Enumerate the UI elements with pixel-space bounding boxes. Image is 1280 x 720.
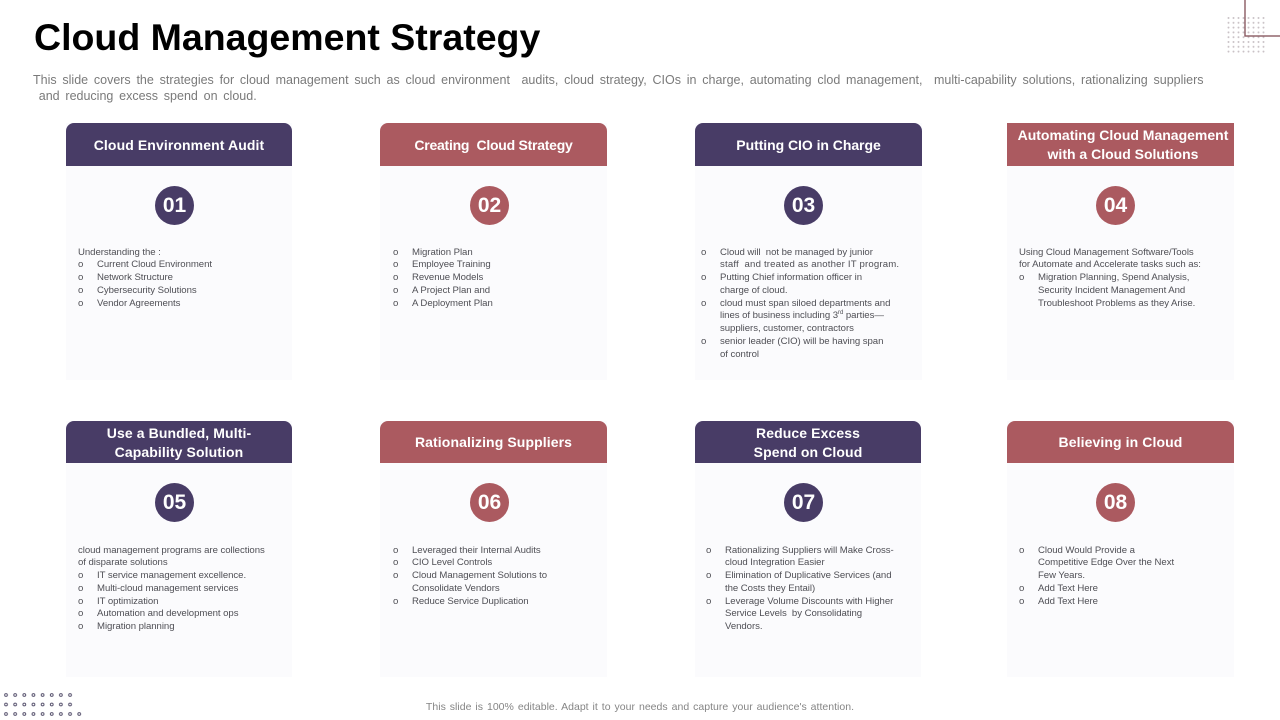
subtitle description: [33, 73, 1204, 102]
text block: card 03: of control: [720, 348, 759, 360]
text block: card 05: Migration planning: [97, 621, 174, 632]
text block: card 02: A Deployment Plan: [412, 298, 493, 308]
text block: card 07: Leverage Volume Discounts with Higher: [725, 596, 893, 606]
panel: card 03: [695, 123, 922, 380]
text block: card 07: Elimination of Duplicative Services (and: [725, 570, 892, 581]
number badge 07: [784, 483, 823, 522]
text block: card 03: senior leader (CIO) will be having span: [720, 336, 883, 347]
text block: card 03: charge of cloud.: [720, 285, 787, 296]
subtitle description: This slide covers the strategies for cloud management such as cloud environment audits, cloud strategy, CIOs in charge, automating clod management, multi-capability solutions, rationalizing suppliers: [33, 73, 1204, 87]
text block: card 03: staff and treated as another IT program.: [720, 259, 899, 270]
text block: card 03: Cloud will not be managed by junior: [720, 246, 873, 258]
text block: card 05: of disparate solutions: [78, 557, 168, 568]
text block: card 06: CIO Level Controls: [412, 557, 492, 568]
text block: card 07: Service Levels by Consolidating: [725, 608, 862, 619]
text block: card 01: Current Cloud Environment: [97, 259, 212, 270]
panel: card 08: [1007, 421, 1234, 677]
number badge 05: [155, 483, 194, 522]
heading: card 05: Use a Bundled, Multi-: [107, 424, 251, 440]
text block: card 01: [78, 246, 212, 308]
text block: card 06: Consolidate Vendors: [412, 583, 500, 594]
text block: card 05: IT service management excellence.: [97, 570, 246, 581]
text block: card 04: for Automate and Accelerate tasks such as:: [1019, 259, 1201, 270]
text block: card 08: [1019, 544, 1174, 606]
text block: card 01: Network Structure: [97, 272, 173, 283]
text block: card 07: Rationalizing Suppliers will Make Cross-: [725, 544, 894, 556]
text block: card 02: [393, 246, 493, 308]
panel: card 04: [1007, 123, 1234, 380]
panel: card 07: [695, 421, 921, 677]
text block: card 06: Cloud Management Solutions to: [412, 570, 547, 581]
text block: card 05: cloud management programs are collections: [78, 544, 265, 556]
text block: card 07: Vendors.: [725, 621, 762, 632]
text block: card 04: Using Cloud Management Software/Tools: [1019, 246, 1194, 258]
text block: card 08: Competitive Edge Over the Next: [1038, 557, 1174, 568]
heading: card 02: [380, 123, 607, 166]
text block: card 04: Migration Planning, Spend Analysis,: [1038, 272, 1189, 283]
heading: card 05: Capability Solution: [115, 444, 243, 460]
panel: card 02: [380, 123, 607, 380]
heading: card 07: Spend on Cloud: [754, 444, 862, 460]
text block: card 01: Vendor Agreements: [97, 298, 180, 308]
number badge 04: 04: [1104, 194, 1127, 217]
text block: card 04: [1019, 246, 1201, 308]
number badge 02: [470, 186, 509, 225]
decoration: bottom left dots: [4, 693, 82, 716]
text block: card 02: Employee Training: [412, 259, 491, 270]
number badge 01: 01: [163, 194, 186, 217]
text block: card 03: [701, 246, 899, 360]
text block: card 06: [393, 544, 547, 606]
heading: card 08: Believing in Cloud: [1059, 434, 1182, 450]
number badge 04: [1096, 186, 1135, 225]
text block: card 05: Multi-cloud management services: [97, 583, 238, 594]
text block: card 03: suppliers, customer, contractors: [720, 323, 854, 334]
heading: card 04: [1007, 123, 1234, 166]
text block: card 07: cloud Integration Easier: [725, 557, 825, 568]
text block: card 05: [78, 544, 265, 632]
panel: card 05: [66, 421, 292, 677]
text block: card 04: Security Incident Management And: [1038, 285, 1185, 296]
text block: card 02: A Project Plan and: [412, 285, 490, 296]
text block: card 06: Reduce Service Duplication: [412, 596, 529, 606]
number badge 06: 06: [478, 491, 501, 514]
text block: card 08: Add Text Here: [1038, 583, 1098, 594]
text block: card 07: the Costs they Entail): [725, 583, 815, 594]
number badge 05: 05: [163, 491, 186, 514]
title: Cloud Management Strategy: [34, 16, 540, 58]
decoration: top right frame and dots: [1228, 0, 1280, 52]
number badge 08: [1096, 483, 1135, 522]
number badge 08: 08: [1104, 491, 1127, 514]
text block: card 03: lines of business including 3rd parties—: [720, 310, 884, 321]
heading: card 08: [1007, 421, 1234, 463]
heading: card 03: [695, 123, 922, 166]
text block: card 02: Migration Plan: [412, 246, 473, 258]
text block: card 08: Add Text Here: [1038, 596, 1098, 606]
text block: card 03: cloud must span siloed departments and: [720, 298, 890, 308]
heading: card 01: [66, 123, 292, 166]
footer note: This slide is 100% editable. Adapt it to your needs and capture your audience's attention.: [426, 701, 854, 713]
text block: card 01: Understanding the :: [78, 246, 161, 258]
heading: card 04: Automating Cloud Management: [1018, 127, 1228, 143]
text block: card 05: IT optimization: [97, 596, 158, 606]
heading: card 05: [66, 421, 292, 463]
number badge 03: [784, 186, 823, 225]
text block: card 06: Leveraged their Internal Audits: [412, 544, 541, 556]
heading: card 04: with a Cloud Solutions: [1048, 146, 1198, 162]
panel: card 01: [66, 123, 292, 380]
heading: card 02: Creating Cloud Strategy: [414, 136, 573, 152]
number badge 01: [155, 186, 194, 225]
text block: card 02: Revenue Models: [412, 272, 483, 283]
text block: card 04: Troubleshoot Problems as they Arise.: [1038, 298, 1195, 308]
number badge 07: 07: [792, 491, 815, 514]
number badge 02: 02: [478, 194, 501, 217]
number badge 06: [470, 483, 509, 522]
panel: card 06: [380, 421, 607, 677]
heading: card 06: [380, 421, 607, 463]
number badge 03: 03: [792, 194, 815, 217]
heading: card 07: Reduce Excess: [756, 424, 860, 440]
text block: card 08: Cloud Would Provide a: [1038, 544, 1135, 556]
subtitle description: and reducing excess spend on cloud.: [39, 88, 257, 102]
text block: card 05: Automation and development ops: [97, 608, 238, 619]
text block: card 08: Few Years.: [1038, 570, 1085, 581]
heading: card 03: Putting CIO in Charge: [736, 136, 881, 152]
text block: card 03: Putting Chief information officer in: [720, 272, 862, 283]
heading: card 06: Rationalizing Suppliers: [415, 434, 572, 450]
heading: card 01: Cloud Environment Audit: [94, 136, 264, 152]
heading: card 07: [695, 421, 921, 463]
text block: card 07: [706, 544, 894, 632]
text block: card 01: Cybersecurity Solutions: [97, 285, 197, 296]
